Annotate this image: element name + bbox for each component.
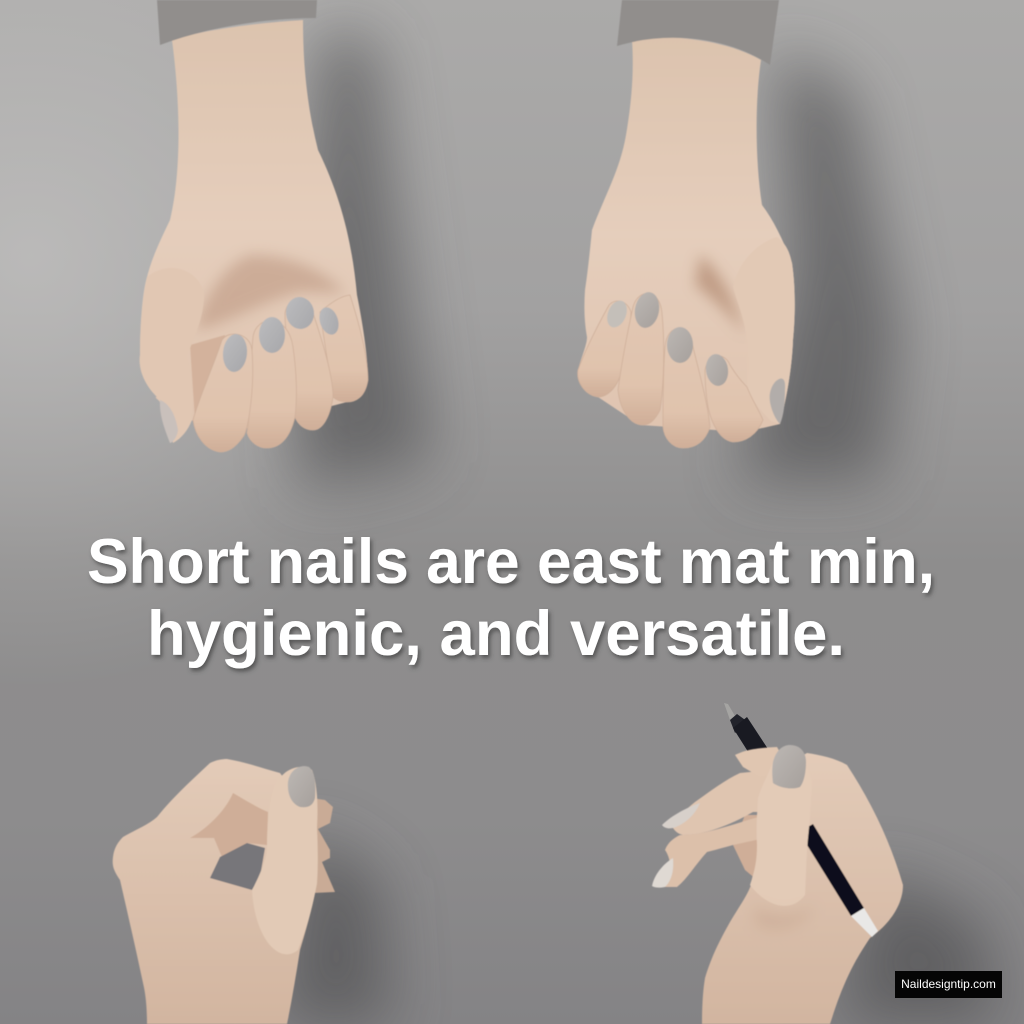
pen tip xyxy=(724,703,735,720)
ring finger xyxy=(618,293,664,425)
watermark badge xyxy=(895,971,1002,998)
pinky nail xyxy=(603,298,631,330)
middle finger xyxy=(247,321,296,448)
thumb nail xyxy=(770,378,785,424)
second finger xyxy=(665,815,765,887)
curled finger underside xyxy=(190,793,268,857)
pinky nail xyxy=(316,305,342,337)
pen end cap xyxy=(851,908,878,937)
hand: top left xyxy=(140,0,368,452)
palm: bottom right xyxy=(702,753,903,1024)
back fingers xyxy=(312,798,335,893)
palm crease shading xyxy=(195,255,345,330)
index nail xyxy=(662,803,700,828)
soft cast shadows xyxy=(280,30,1000,1024)
hand: bottom right xyxy=(652,745,903,1024)
top finger xyxy=(735,747,790,777)
pinky finger xyxy=(320,295,368,402)
middle nail xyxy=(667,327,693,363)
watermark text: Naildesigntip.com xyxy=(901,977,996,991)
headline text xyxy=(87,527,935,669)
thumb nail xyxy=(160,400,178,443)
thumb base shadow xyxy=(755,905,815,930)
headline line 1: Short nails are east mat min, xyxy=(87,527,935,597)
pen collar xyxy=(730,714,748,733)
index finger xyxy=(705,356,763,442)
hand: bottom left xyxy=(113,759,335,1024)
palm: top left xyxy=(140,20,368,430)
thumb xyxy=(750,749,812,906)
headline line 2: hygienic, and versatile. xyxy=(147,599,845,669)
shadow under fingers xyxy=(190,335,225,420)
hand: top right xyxy=(578,0,795,448)
palm: top right xyxy=(578,37,795,432)
pen upper xyxy=(724,703,770,758)
thumb nail xyxy=(288,766,315,807)
index nail xyxy=(704,353,730,387)
index finger xyxy=(193,334,253,452)
pinky finger xyxy=(578,301,631,397)
ring finger xyxy=(285,299,333,430)
sleeve: top right xyxy=(617,0,779,65)
second nail xyxy=(652,858,673,888)
ring nail xyxy=(632,290,662,330)
lower finger web xyxy=(733,815,760,880)
middle nail xyxy=(259,317,285,353)
index nail xyxy=(221,333,249,373)
palm: bottom left xyxy=(113,759,317,1024)
middle finger xyxy=(663,328,710,448)
thumb nail xyxy=(772,745,806,788)
palm crease shading xyxy=(695,255,745,335)
thumb xyxy=(140,268,204,443)
pen barrel top xyxy=(733,717,770,758)
thumb xyxy=(733,237,795,424)
pen lower barrel xyxy=(799,824,864,916)
thumb xyxy=(252,767,318,954)
thumb-finger gap xyxy=(210,843,265,890)
sleeve: top left xyxy=(157,0,317,45)
ring nail xyxy=(284,295,316,331)
index finger xyxy=(673,770,770,835)
